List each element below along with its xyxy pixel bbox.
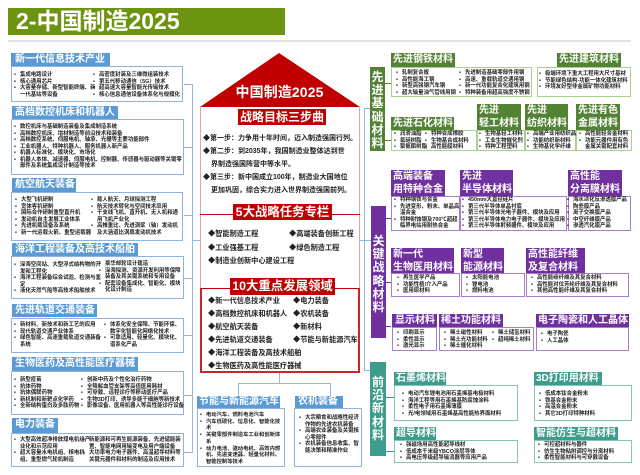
text block: three steps	[203, 134, 357, 194]
panel: 先进基础材料 label: 先进基础材料	[371, 70, 384, 150]
text block: three steps: ◆第一步：力争用十年时间，迈入制造强国行列。	[203, 135, 357, 142]
text block: 润滑油脂	[400, 131, 422, 137]
heading: 5大战略任务专栏: 5大战略任务专栏	[236, 205, 329, 219]
text block: three steps: ◆第三步：新中国成立100年，制造业大国地位	[203, 174, 348, 181]
heading: 先进钢铁材料	[393, 54, 453, 65]
text block	[391, 67, 532, 97]
text block: 大型飞机研制	[21, 197, 53, 203]
panel: central house	[200, 53, 360, 373]
text block	[525, 130, 576, 151]
text block: 绿色智能、高速重载轨道交通装备系统	[20, 335, 101, 348]
right connector bracket	[359, 108, 371, 371]
text block: 仿生生物粘附调控与分离材料	[544, 448, 614, 454]
text block	[391, 273, 460, 297]
heading: 先进	[479, 105, 499, 116]
panel: 先进纺织材料	[525, 104, 576, 151]
text block: 特种钢铁与合金	[400, 197, 438, 203]
heading: 10大重点发展领域: 10大重点发展领域	[232, 279, 333, 293]
panel: 高档数控机床和机器人	[11, 106, 184, 175]
text block: 铁基合金粉末	[545, 398, 577, 404]
heading: 金属材料	[578, 118, 618, 129]
connector under house	[238, 373, 331, 396]
panel: 关键战略材料 label: 关键战略材料	[372, 234, 384, 314]
text block: 高端产业用纺织品	[533, 131, 576, 137]
text block: 功能性植/介入产品	[403, 282, 448, 288]
text block	[568, 196, 631, 231]
panel: 新一代信息技术产业	[11, 53, 183, 102]
text block: 人工晶体	[547, 338, 569, 344]
text block	[391, 196, 460, 231]
panel: 高端装备用特种合金	[391, 170, 460, 231]
text block	[11, 433, 184, 467]
text block	[534, 385, 632, 421]
list: five projects: ◆智能制造工程	[208, 229, 258, 238]
text block: 航天技术转化与空间技术应用	[97, 204, 167, 210]
text block: 高档数控机床、增材制造等前沿技术和装备	[20, 130, 122, 136]
text block: 配套设备集成化、智能化、模块化设计制造	[105, 280, 180, 293]
text block: 第三代半导体单晶衬底	[468, 204, 522, 210]
text block: 第三代半导体射频器件、模块及应用	[468, 223, 554, 229]
list: five projects: ◆工业强基工程	[208, 243, 258, 252]
panel: 先进有色金属材料	[576, 104, 632, 151]
text block: 第三代半导体光电子器件、模块及应用	[468, 210, 560, 216]
heading: 显示材料	[395, 315, 435, 326]
text block: 载人航天、月球探测工程	[97, 197, 156, 203]
text block	[477, 130, 525, 151]
text block: 可控超材料与器件	[544, 442, 587, 448]
text block	[534, 440, 632, 463]
panel: 生物医药及高性能医疗器械	[11, 357, 184, 415]
text block	[11, 318, 184, 353]
text block: 生物3D打印、诱导多能干细胞等新技术	[87, 396, 180, 402]
heading: 稀土功能材料	[441, 315, 501, 326]
text block: 海洋工程装备综合试验、检测与鉴定	[20, 275, 101, 288]
text block: 抗体药物	[20, 384, 42, 390]
text block: 高推重比、先进涡桨（轴）发动机及大涵道比涡扇发动机技术	[97, 223, 178, 236]
heading	[461, 248, 504, 273]
text block: 大功率电力电子器件、高温超导材料等关键元器件和材料的制造及应用技术	[89, 450, 181, 462]
text block: 低成本千米级YBCO涂层导体	[406, 448, 475, 454]
text block: 体系化安全保障、节能环保、数字化智能化网络化技术	[110, 322, 180, 334]
panel: 先进石化材料	[391, 117, 477, 151]
heading	[525, 104, 568, 130]
heading	[460, 170, 513, 196]
list: ten key fields: ◆航空航天装备	[208, 322, 258, 331]
text block: 渗透汽化膜产品	[573, 223, 611, 229]
heading: 超导材料	[396, 428, 436, 439]
heading: 生物医用材料	[393, 262, 453, 273]
heading	[477, 104, 521, 130]
panel: 先进钢铁材料	[391, 53, 532, 97]
text block: 高档数控系统、伺服电机、轴承、光栅等主要功能部件	[20, 137, 149, 143]
text block: 先进机载设备及系统	[21, 223, 70, 229]
heading	[526, 248, 585, 273]
text block: 医用原材料	[403, 288, 430, 294]
panel: 前沿新材料 label: 前沿新材料	[372, 375, 384, 442]
text block: 电子陶瓷	[547, 331, 569, 337]
panel: 超导材料	[394, 427, 518, 463]
text block: 聚氨酯树脂	[400, 144, 427, 150]
text block	[461, 273, 525, 297]
text block: 强磁场用高性能超导线材	[406, 442, 465, 448]
text block: 印刷显示	[403, 330, 425, 336]
panel: 高性能纤维及复合材料	[526, 248, 629, 297]
panel: 稀土功能材料	[439, 314, 534, 351]
text block	[439, 327, 534, 351]
list: ten key fields: ◆新一代信息技术产业	[208, 296, 280, 305]
text block: 极端环境下重大工程用大尺寸基材	[545, 71, 626, 77]
heading: 航空航天装备	[15, 179, 75, 190]
text block: 生物基合成材料	[431, 138, 469, 144]
heading: 3D打印用材料	[536, 373, 599, 384]
text block: 工业生物催化剂	[485, 138, 523, 144]
text block	[391, 130, 477, 151]
text block: 高性能碳纤维及其复合材料	[537, 275, 602, 281]
text block: 新型高强钢汽车钢	[402, 83, 445, 89]
panel: 电力装备	[11, 418, 184, 467]
text block: 可穿戴、远程诊疗等移动医疗产品	[87, 390, 168, 396]
heading: 先进石化材料	[393, 118, 453, 129]
text block: 第三代半导体电力电子器件、模块及应用	[468, 216, 565, 222]
heading: 先进有色	[578, 105, 618, 116]
list: ten key fields: ◆农机装备	[293, 309, 329, 318]
text block: 新一代运载火箭、重型运载器	[21, 230, 91, 236]
list: ten key fields: ◆生物医药及高性能医疗器械	[208, 361, 301, 370]
text block: 低成本钛合金粉末	[545, 391, 588, 397]
list: five projects: ◆制造业创新中心建设工程	[208, 256, 294, 265]
text block: 动力电池、驱动电机、高效内燃机、先进变速器、轻量化材料、智能控制等技术	[206, 446, 280, 465]
text block: 高温合金粉末	[545, 404, 577, 410]
panel: 3D打印用材料	[534, 372, 632, 421]
heading: 海洋工程装备及高技术船舶	[15, 244, 135, 255]
text block: 其它3D打印特种材料	[545, 410, 595, 416]
text block: three steps: 界制造强国阵营中等水平。	[211, 161, 295, 168]
text block: 新一代功能复合化建筑用钢	[465, 83, 530, 89]
heading	[391, 170, 445, 196]
text block: 激光显示	[403, 343, 425, 349]
text block: 高电压等级超导输流器等应用产品	[406, 455, 487, 461]
panel: 电子陶瓷和人工晶体	[536, 314, 629, 351]
text block: 特种合成橡胶	[431, 131, 463, 137]
text block: 新能源和可再生能源装备、先进储能装置、智能电网用输变电及用户端设备	[89, 437, 181, 450]
list: five projects	[208, 229, 354, 265]
text block: 柔性电子用石墨烯薄膜	[408, 404, 462, 410]
text block: 新机制和新靶点化学药	[20, 396, 74, 402]
text block	[394, 440, 518, 463]
text block: 生物基轻工材料	[485, 131, 523, 137]
text block: 现代轨道交通产业体系	[20, 328, 74, 334]
text block: 太阳能电池	[472, 275, 499, 281]
text block	[576, 130, 632, 151]
text block: 离子交换膜产品	[573, 210, 611, 216]
text block: 集成电路设计	[20, 72, 52, 78]
text block: 全降解血管支架等高值医用耗材	[87, 384, 162, 390]
text block: 关键零部件制造车工业和创新体系	[206, 432, 280, 445]
text block	[392, 327, 437, 351]
text block: 新材料、新技术和新工艺的应用	[20, 322, 95, 328]
text block: 创新中药及个性化治疗药物	[87, 377, 152, 383]
text block: 超高速大容量智能光传输技术	[99, 85, 169, 91]
text block: 先进变形、粉末、单晶高温合金	[400, 204, 459, 216]
heading: 智能仿生与超材料	[536, 428, 616, 439]
list: five projects: ◆高端装备创新工程	[289, 229, 354, 238]
text block: 电动汽车锂电池用石墨烯基电极材料	[408, 391, 494, 397]
text block: 汽车低碳化、信息化、智能化技术	[206, 419, 280, 431]
text block: 豪华邮轮设计建造	[105, 261, 148, 267]
text block: 大宗粮食和战略性经济作物的先进农机装备	[305, 415, 359, 428]
text block: 中空纤维膜产品	[573, 216, 611, 222]
text block: 燃料电池	[472, 288, 494, 294]
text block: 高性能对位芳纶纤维及其复合材料	[537, 282, 618, 288]
text block: 超纯稀土材料	[498, 336, 530, 342]
text block	[526, 273, 629, 297]
heading: 纺织材料	[527, 118, 567, 129]
list: ten key fields: ◆海洋工程装备及高技术船舶	[208, 348, 301, 357]
text block: 海洋工程等用石墨烯基防腐蚀涂料	[408, 398, 489, 404]
text block: 陶瓷膜产品	[573, 204, 600, 210]
panel: 智能仿生与超材料	[534, 427, 632, 463]
heading: 先进	[527, 105, 547, 116]
heading: 高档数控机床和机器人	[15, 107, 115, 118]
text block: 轧制复合板	[402, 70, 429, 76]
text block	[11, 256, 184, 299]
panel: 新型能源材料	[461, 248, 525, 297]
panel: 农机装备	[294, 396, 362, 467]
heading: 半导体材料	[462, 184, 512, 195]
text block: 核心信息通信设备体系化与规模化	[99, 92, 180, 98]
text block: 数控机床与基础制造装备及集成制造系统	[20, 124, 117, 130]
heading: 新一代信息技术产业	[15, 54, 105, 65]
text block	[11, 371, 184, 415]
list: ten key fields: ◆节能与新能源汽车	[293, 335, 358, 344]
text block: 450mm大直径硅片	[468, 197, 514, 203]
panel: 节能与新能源汽车	[197, 396, 285, 467]
text block: 柔性智能材料与可穿戴设备	[544, 455, 609, 461]
text block: three steps: ◆第二步：到2035年，我国制造业整体达到世	[203, 148, 345, 155]
text block: 高性能海工钢	[402, 76, 434, 82]
text block: 稀土磁性材料	[450, 330, 482, 336]
title banner	[8, 8, 285, 35]
house roof	[200, 53, 360, 107]
heading: 分离膜材料	[570, 184, 620, 195]
text block	[294, 408, 362, 467]
panel: 先进半导体材料	[460, 170, 567, 231]
heading: 及复合材料	[528, 262, 578, 273]
heading	[391, 248, 454, 273]
heading: 节能与新能源汽车	[199, 396, 279, 407]
text block: 高速、重载轨道交通用钢	[465, 76, 524, 82]
heading: 高端装备	[393, 171, 433, 182]
heading: 先进建筑材料	[559, 54, 619, 65]
panel: 航空航天装备	[11, 178, 183, 241]
panel: 高性能分离膜材料	[567, 170, 631, 231]
panel: 石墨烯材料	[394, 372, 518, 421]
heading: 电子陶瓷和人工晶体	[538, 315, 628, 326]
heading	[576, 104, 620, 130]
text block: 先进制造基础零部件用钢	[465, 70, 524, 76]
text block: 深海探测、资源开发利用等保障装备及其关键系统和专用设备	[105, 268, 180, 280]
panel: 先进轨道交通装备	[11, 304, 184, 353]
text block: 工业机器人、特种机器人、服务机器人新产品	[20, 144, 128, 150]
list: ten key fields: ◆新材料	[293, 322, 322, 331]
text block: 国际合作研制重型直升机	[21, 210, 80, 216]
text block: 再生医学产品	[403, 275, 435, 281]
heading: 能源材料	[463, 262, 503, 273]
text block: 高端农业装备及关键核心零部件	[305, 428, 359, 441]
text block: 高性能轻合金材料	[585, 131, 628, 137]
list: ten key fields: ◆先进轨道交通装备	[208, 335, 273, 344]
heading: 先进	[462, 171, 482, 182]
text block: 生物基化学纤维	[533, 144, 571, 150]
list: ten key fields: ◆高档数控机床和机器人	[208, 309, 287, 318]
heading: 用特种合金	[393, 184, 443, 195]
text block: 核心通用芯片	[20, 78, 52, 84]
text block: 其他高性能纤维及其复合材料	[537, 288, 607, 294]
text block: 大容量存储、新型智能终端、新一代基站等设备	[20, 85, 95, 98]
text block: 干支线飞机、直升机、无人机和通用飞机产业化	[97, 210, 178, 222]
text block: 功能纺织新材料	[533, 138, 571, 144]
heading: 高性能纤维	[528, 249, 578, 260]
text block: 宽体客机研制	[21, 204, 53, 210]
text block	[11, 119, 184, 175]
panel: 显示材料	[392, 314, 437, 351]
text block	[197, 408, 285, 467]
house title: 中国制造2025	[236, 84, 323, 100]
text block: 稀土光功能材料	[450, 336, 488, 342]
heading: 战略目标三步曲: 战略目标三步曲	[240, 110, 324, 124]
text block: 稀土储氢材料	[498, 330, 530, 336]
panel: 新一代生物医用材料	[391, 248, 460, 297]
text block	[536, 327, 629, 351]
heading: 轻工材料	[479, 118, 519, 129]
text block: three steps: 更加巩固，综合实力进入世界制造强国前列。	[211, 187, 351, 194]
list: ten key fields	[208, 296, 358, 370]
text block: 高性能膜材料	[431, 144, 463, 150]
text block	[11, 66, 183, 102]
text block: 第五代移动通信（5G）技术	[99, 78, 166, 84]
text block: 机器人本体、减速器、伺服电机、控制器、传感器与驱动器等关键零部件及系统集成设计制造等技术	[20, 156, 182, 169]
heading	[568, 170, 622, 196]
text block: 影像设备、医用机器人等高性能诊疗设备	[87, 403, 184, 409]
text block: 机器人标准化、模块化、市场化	[20, 150, 95, 156]
text block: 全新结构蛋白及多肽药物	[20, 403, 79, 409]
text block: 海水淡化反渗透膜产品	[573, 197, 627, 203]
text block: 高密度封装及三维微组装技术	[99, 72, 169, 78]
text block: 柔性显示	[403, 336, 425, 342]
text block	[537, 67, 631, 97]
text block: 锂电池	[472, 282, 488, 288]
text block: 稀土催化材料	[450, 343, 482, 349]
text block: 可靠适用、轻量化、模块化、谱系化产品	[110, 335, 180, 348]
text block	[11, 192, 183, 241]
text block: 节能绿色结构-功能一体化建筑材料	[545, 78, 628, 84]
text block: 发动机自主发展工业体系	[21, 216, 80, 222]
text block: 大型高效超净排放煤电机组产业化和示范应用	[20, 437, 90, 450]
heading: 生物医药及高性能医疗器械	[15, 358, 135, 369]
text block: 超大输量油气管线用钢	[402, 90, 456, 96]
title banner: 2-中国制造2025	[16, 8, 180, 34]
text block	[460, 196, 567, 231]
heading: 先进轨道交通装备	[15, 305, 95, 316]
text block: 特种装备用超高强度不锈钢	[465, 90, 530, 96]
panel: 先进轻工材料	[477, 104, 525, 151]
text block: 环境友好型非金属矿物功能材料	[545, 84, 620, 90]
heading	[12, 418, 58, 433]
text block	[394, 385, 518, 421]
text block: 功能元器件用有色金属关键配套材料	[585, 138, 628, 150]
text block: 特种工程塑料	[485, 144, 517, 150]
text block: 新型疫苗	[20, 377, 42, 383]
text block: 氟硅树脂	[400, 138, 422, 144]
text block: 深海空间站、大型浮式结构物的开发和工程化	[20, 262, 101, 274]
text block: 液化天然气船等高技术船舶技术	[20, 288, 95, 294]
text block: 电动汽车、燃料电池汽车	[206, 412, 264, 418]
text block: 光/电领域用石墨烯基高性能热界面材料	[408, 410, 501, 416]
text block: 特种耐蚀钢及700℃超超临界电站用耐热合金	[400, 216, 458, 229]
heading: 电力装备	[15, 419, 55, 430]
panel: 海洋工程装备及高技术船舶	[11, 243, 184, 299]
heading: 农机装备	[298, 396, 338, 407]
heading: 新一代	[393, 249, 423, 260]
list: ten key fields: ◆电力装备	[293, 296, 329, 305]
heading: 新型	[463, 249, 483, 260]
heading: 石墨烯材料	[396, 373, 446, 384]
panel: 先进建筑材料	[537, 53, 631, 97]
left connector bracket	[184, 84, 200, 453]
heading: 高性能	[570, 171, 600, 182]
text block: 超大容量水电机组、核电机组、重型燃气轮机制造	[20, 450, 85, 462]
list: five projects: ◆绿色制造工程	[289, 243, 339, 252]
text block: 抗体偶联药物	[20, 390, 52, 396]
text block: 农机装备信息收集、智能决策和精准作业	[305, 441, 359, 454]
